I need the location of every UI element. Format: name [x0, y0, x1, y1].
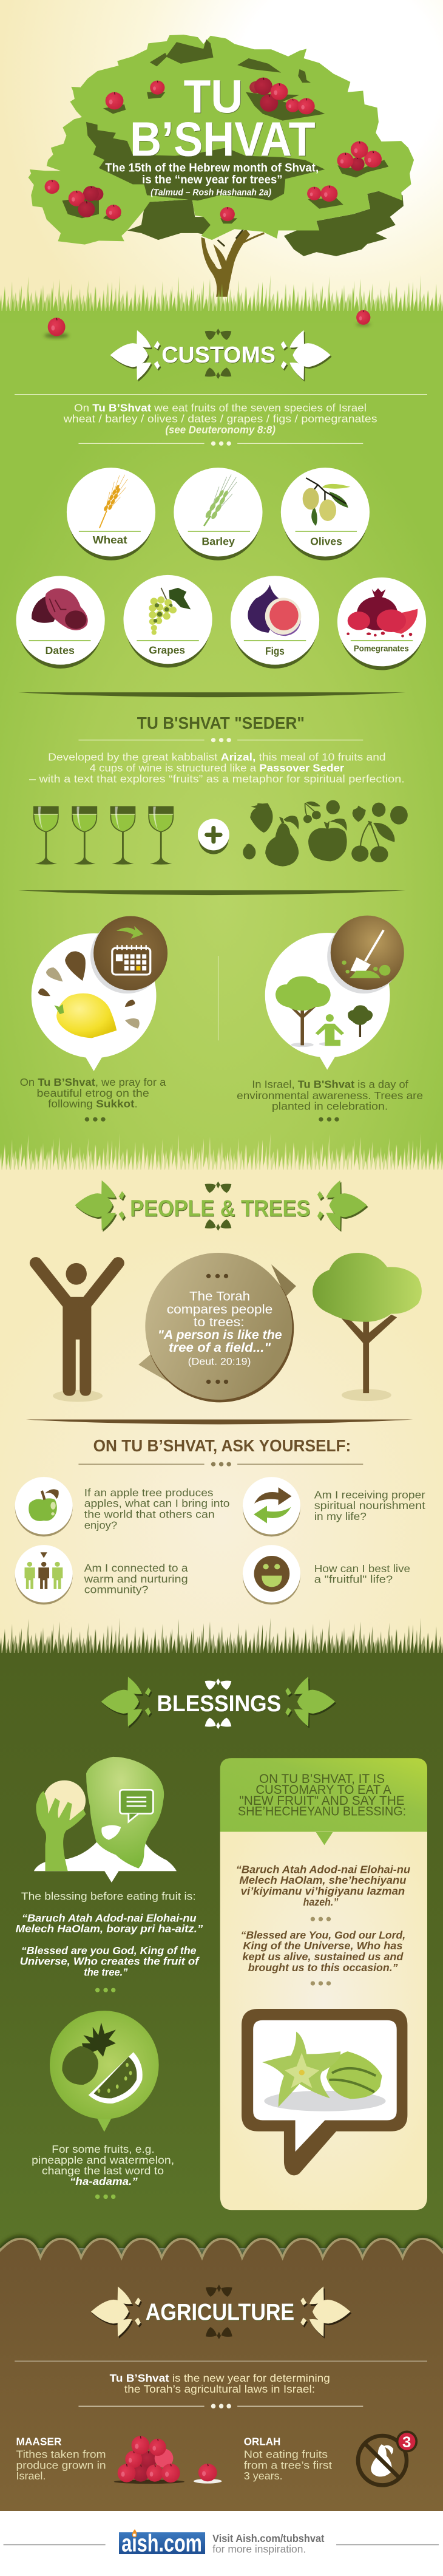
question: apple: apples, what can I bring into	[84, 1498, 230, 1510]
icon: large tree	[276, 976, 331, 1047]
ornament leaves	[91, 2286, 350, 2337]
footer text: Visit Aish.com/tubshvat	[212, 2532, 325, 2544]
blessings section background	[0, 1653, 443, 2248]
icon: person with fruit	[34, 1757, 177, 1883]
etrog bubble	[32, 916, 167, 1071]
ornament shadow	[76, 1182, 368, 1232]
customs label: CUSTOMS	[161, 342, 276, 368]
dark canopy shadow	[127, 191, 404, 256]
lens divider	[26, 1419, 413, 1425]
environment caption	[237, 1078, 423, 1122]
agriculture intro	[110, 2372, 330, 2395]
dots divider	[78, 738, 363, 742]
agriculture label: AGRICULTURE	[146, 2299, 294, 2325]
dots divider	[78, 1462, 363, 1467]
icon: tree	[313, 1253, 422, 1401]
seder text: Developed by the great kabbalist Arizal, this meal of 10 fruits and	[48, 751, 386, 763]
sky background	[0, 0, 443, 316]
icon: shovel	[350, 930, 385, 973]
scallop rim	[0, 2239, 443, 2258]
environment bubble	[265, 916, 404, 1070]
speech bubble: to trees:	[194, 1315, 245, 1329]
new fruit panel	[220, 1758, 427, 2210]
vertical divider	[217, 956, 219, 1040]
scallop shadow	[0, 2239, 443, 2258]
etrog caption: beautiful etrog on the	[37, 1087, 149, 1099]
four wine cups	[34, 806, 173, 865]
title: B’SHVAT	[130, 113, 316, 166]
plus sign	[198, 819, 229, 854]
agriculture heading	[91, 2285, 351, 2339]
agriculture intro: Tu B’Shvat is the new year for determining	[110, 2372, 330, 2384]
title	[130, 70, 316, 166]
apple pile	[114, 2436, 184, 2484]
environment caption: In Israel, Tu B'Shvat is a day of	[252, 1078, 408, 1090]
panel blessing text: kept us alive, sustained us and	[242, 1951, 404, 1963]
panel heading: SHE’HECHEYANU BLESSING:	[238, 1804, 406, 1819]
bottom of left blessings column	[4, 2143, 439, 2557]
question: community: warm and nurturing	[84, 1573, 188, 1585]
customs heading	[110, 329, 332, 382]
question: arrows: spiritual nourishment	[314, 1500, 425, 1511]
ornament shadow	[92, 2288, 351, 2339]
panel blessing text: King of the Universe, Who has	[243, 1940, 403, 1952]
panel heading: ON TU B’SHVAT, IT IS	[259, 1772, 385, 1786]
grass: dark	[0, 1618, 443, 1666]
panel heading: "NEW FRUIT" AND SAY THE	[239, 1793, 405, 1808]
species: wheat: Wheat	[93, 533, 127, 546]
etrog fruit	[56, 993, 117, 1038]
tree illustration	[29, 35, 414, 297]
species: barley	[174, 468, 263, 561]
blessings section	[16, 1677, 427, 2210]
dots divider	[78, 441, 363, 446]
caption: fruits: “ha-adama.”	[70, 2175, 138, 2187]
panel blessing text: Melech HaOlam, she’hechiyanu	[239, 1875, 407, 1886]
scallop edge	[0, 2239, 443, 2511]
icon: calendar	[112, 945, 150, 975]
caption: fruits: For some fruits, e.g.	[52, 2143, 155, 2155]
speech bubble: The Torah	[189, 1289, 250, 1303]
grass: cream	[0, 1133, 443, 1181]
people and trees section background	[0, 1170, 443, 1655]
caption: fruits: pineapple and watermelon,	[32, 2154, 174, 2166]
footer text	[212, 2532, 325, 2555]
panel blessing text: brought us to this occasion.”	[248, 1961, 398, 1974]
left blessing text: The blessing before eating fruit is:	[21, 1890, 196, 1902]
footer text: for more inspiration.	[212, 2543, 306, 2555]
orlah text: ORLAH	[244, 2436, 280, 2448]
species: olives: Olives	[310, 535, 342, 547]
maaser text	[16, 2436, 106, 2482]
icon: no fruit for three years	[358, 2431, 418, 2485]
lens divider	[18, 890, 405, 895]
intro text: On Tu B’Shvat we eat fruits of the seven species of Israel	[74, 402, 367, 414]
question: apple: enjoy?	[84, 1519, 117, 1531]
speech bubble: compares people	[167, 1302, 272, 1317]
panel blessing text: “Baruch Atah Adod-nai Elohai-nu	[236, 1864, 410, 1875]
panel blessing text: vi’kiyimanu vi’higiyanu lazman	[241, 1885, 405, 1897]
question: arrows: in my life?	[314, 1510, 367, 1522]
ask yourself heading: ON TU B’SHVAT, ASK YOURSELF:	[93, 1436, 351, 1455]
citation: (see Deuteronomy 8:8)	[165, 424, 276, 435]
seven species	[16, 424, 426, 670]
species: wheat	[67, 468, 155, 561]
orlah text: from a tree’s first	[244, 2459, 332, 2472]
seder section	[18, 692, 405, 785]
question: community: Am I connected to a	[84, 1562, 188, 1574]
question: smile: How can I best live	[314, 1562, 410, 1575]
speech bubble: (Deut. 20:19)	[188, 1355, 251, 1367]
caption: fruits: change the last word to	[42, 2164, 164, 2176]
ornament shadow	[103, 1678, 336, 1728]
fallen apples	[44, 310, 371, 338]
panel heading: CUSTOMARY TO EAT A	[255, 1782, 392, 1797]
subtitle	[105, 162, 319, 197]
orlah text	[244, 2436, 332, 2482]
left blessing text: the tree.”	[84, 1966, 128, 1978]
species: figs	[231, 576, 319, 669]
species: pomegranates: Pomegranates	[354, 644, 409, 653]
icon: person	[316, 1014, 344, 1046]
panel blessing text: hazeh.”	[303, 1896, 338, 1908]
left blessing text: “Blessed are you God, King of the	[21, 1944, 197, 1957]
seder text: 4 cups of wine is structured like a Passover Seder	[90, 762, 344, 774]
customs section background	[0, 311, 443, 1173]
left blessing text: Melech HaOlam, boray pri ha-aitz.”	[16, 1923, 203, 1935]
maaser text: produce grown in	[16, 2459, 106, 2472]
ornament shadow	[111, 332, 332, 382]
question: smile: a "fruitful" life?	[314, 1573, 393, 1586]
species: grapes	[123, 575, 212, 668]
people and trees heading	[75, 1181, 368, 1232]
center leaves	[205, 329, 231, 379]
blessings label: BLESSINGS	[157, 1691, 281, 1717]
environment caption: environmental awareness. Trees are	[237, 1089, 423, 1102]
speech bubble: tree of a field..."	[169, 1340, 271, 1355]
orlah text: Not eating fruits	[244, 2448, 328, 2461]
speech bubble	[138, 1253, 296, 1402]
species: figs: Figs	[265, 644, 285, 657]
intro text	[63, 402, 377, 424]
seder text: – with a text that explores “fruits” as a metaphor for spiritual perfection.	[29, 773, 405, 785]
seder text	[29, 751, 405, 785]
species: barley: Barley	[201, 535, 235, 547]
maaser text: Israel.	[16, 2470, 46, 2482]
etrog caption: On Tu B’Shvat, we pray for a	[20, 1076, 166, 1088]
question: arrows: Am I receiving proper	[314, 1489, 425, 1501]
heading label: PEOPLE & TREES	[130, 1195, 310, 1221]
tree trunk and branches	[201, 229, 264, 297]
panel blessing text	[236, 1864, 410, 1986]
white footer background	[0, 2510, 443, 2576]
aish.com logo: aish.com	[121, 2530, 202, 2557]
subtitle: is the “new year for trees”	[142, 173, 283, 186]
intro text: wheat / barley / olives / dates / grapes / figs / pomegranates	[63, 413, 377, 424]
caption: fruits	[32, 2143, 174, 2199]
panel heading	[238, 1772, 406, 1819]
maaser text: MAASER	[16, 2436, 62, 2448]
drops	[65, 951, 86, 981]
intro divider	[15, 394, 427, 395]
panel blessing text: “Blessed are You, God our Lord,	[241, 1929, 405, 1941]
icon: pineapple and watermelon	[50, 2011, 159, 2132]
species: dates: Dates	[45, 644, 75, 656]
icon: arrow onto calendar	[117, 926, 143, 939]
footer rules	[4, 2544, 439, 2545]
icon: small tree	[348, 1005, 373, 1037]
etrog caption: following Sukkot.	[48, 1098, 138, 1110]
species: grapes: Grapes	[149, 644, 185, 656]
center leaves	[205, 1182, 231, 1231]
question: apple	[15, 1477, 230, 1536]
environment caption: planted in celebration.	[272, 1100, 388, 1113]
etrog caption	[20, 1076, 166, 1122]
icon: no fruit for three years: 3	[402, 2435, 411, 2451]
orlah text: 3 years.	[244, 2470, 283, 2482]
title: TU	[184, 70, 243, 123]
speech bubble: "A person is like the	[158, 1327, 282, 1342]
light canopy foliage	[29, 35, 414, 245]
left blessing text: “Baruch Atah Adod-nai Elohai-nu	[22, 1912, 197, 1924]
four cups and fruits	[34, 800, 408, 867]
fruit silhouettes	[243, 800, 408, 867]
ornament leaves	[110, 330, 331, 380]
species: pomegranates	[337, 578, 426, 670]
brown ground	[0, 2239, 443, 2511]
dark foliage patches	[62, 39, 388, 223]
question: apple: If an apple tree produces	[84, 1487, 214, 1499]
subtitle: (Talmud – Rosh Hashanah 2a)	[150, 188, 271, 197]
lens divider	[18, 692, 405, 697]
center leaves	[206, 2285, 232, 2339]
ornament leaves	[101, 1677, 335, 1726]
seder heading: TU B'SHVAT "SEDER"	[137, 714, 305, 732]
apples on tree	[45, 78, 382, 221]
question: community: community?	[84, 1584, 149, 1596]
question: apple: the world that others can	[84, 1508, 215, 1520]
species: dates	[16, 576, 105, 669]
center leaves	[205, 1678, 231, 1729]
icon: person arms raised	[36, 1263, 118, 1402]
question: community	[15, 1545, 188, 1604]
people and trees panel	[15, 1253, 425, 1604]
grass: green	[0, 275, 443, 323]
maaser text: Tithes taken from	[16, 2448, 106, 2461]
etrog and environment section	[18, 890, 423, 1122]
species: olives	[281, 468, 370, 561]
agriculture divider	[15, 2361, 427, 2362]
single apple	[194, 2464, 222, 2484]
question: arrows	[243, 1477, 425, 1536]
starfruit speech box	[242, 2009, 407, 2175]
ornament leaves	[75, 1181, 367, 1230]
agriculture intro: the Torah’s agricultural laws in Israel:	[124, 2383, 315, 2395]
left blessing text: Universe, Who creates the fruit of	[20, 1955, 200, 1968]
subtitle: The 15th of the Hebrew month of Shvat,	[105, 162, 319, 174]
dots divider	[78, 2404, 363, 2408]
question: smile	[243, 1545, 410, 1604]
left blessing text	[16, 1890, 203, 1992]
